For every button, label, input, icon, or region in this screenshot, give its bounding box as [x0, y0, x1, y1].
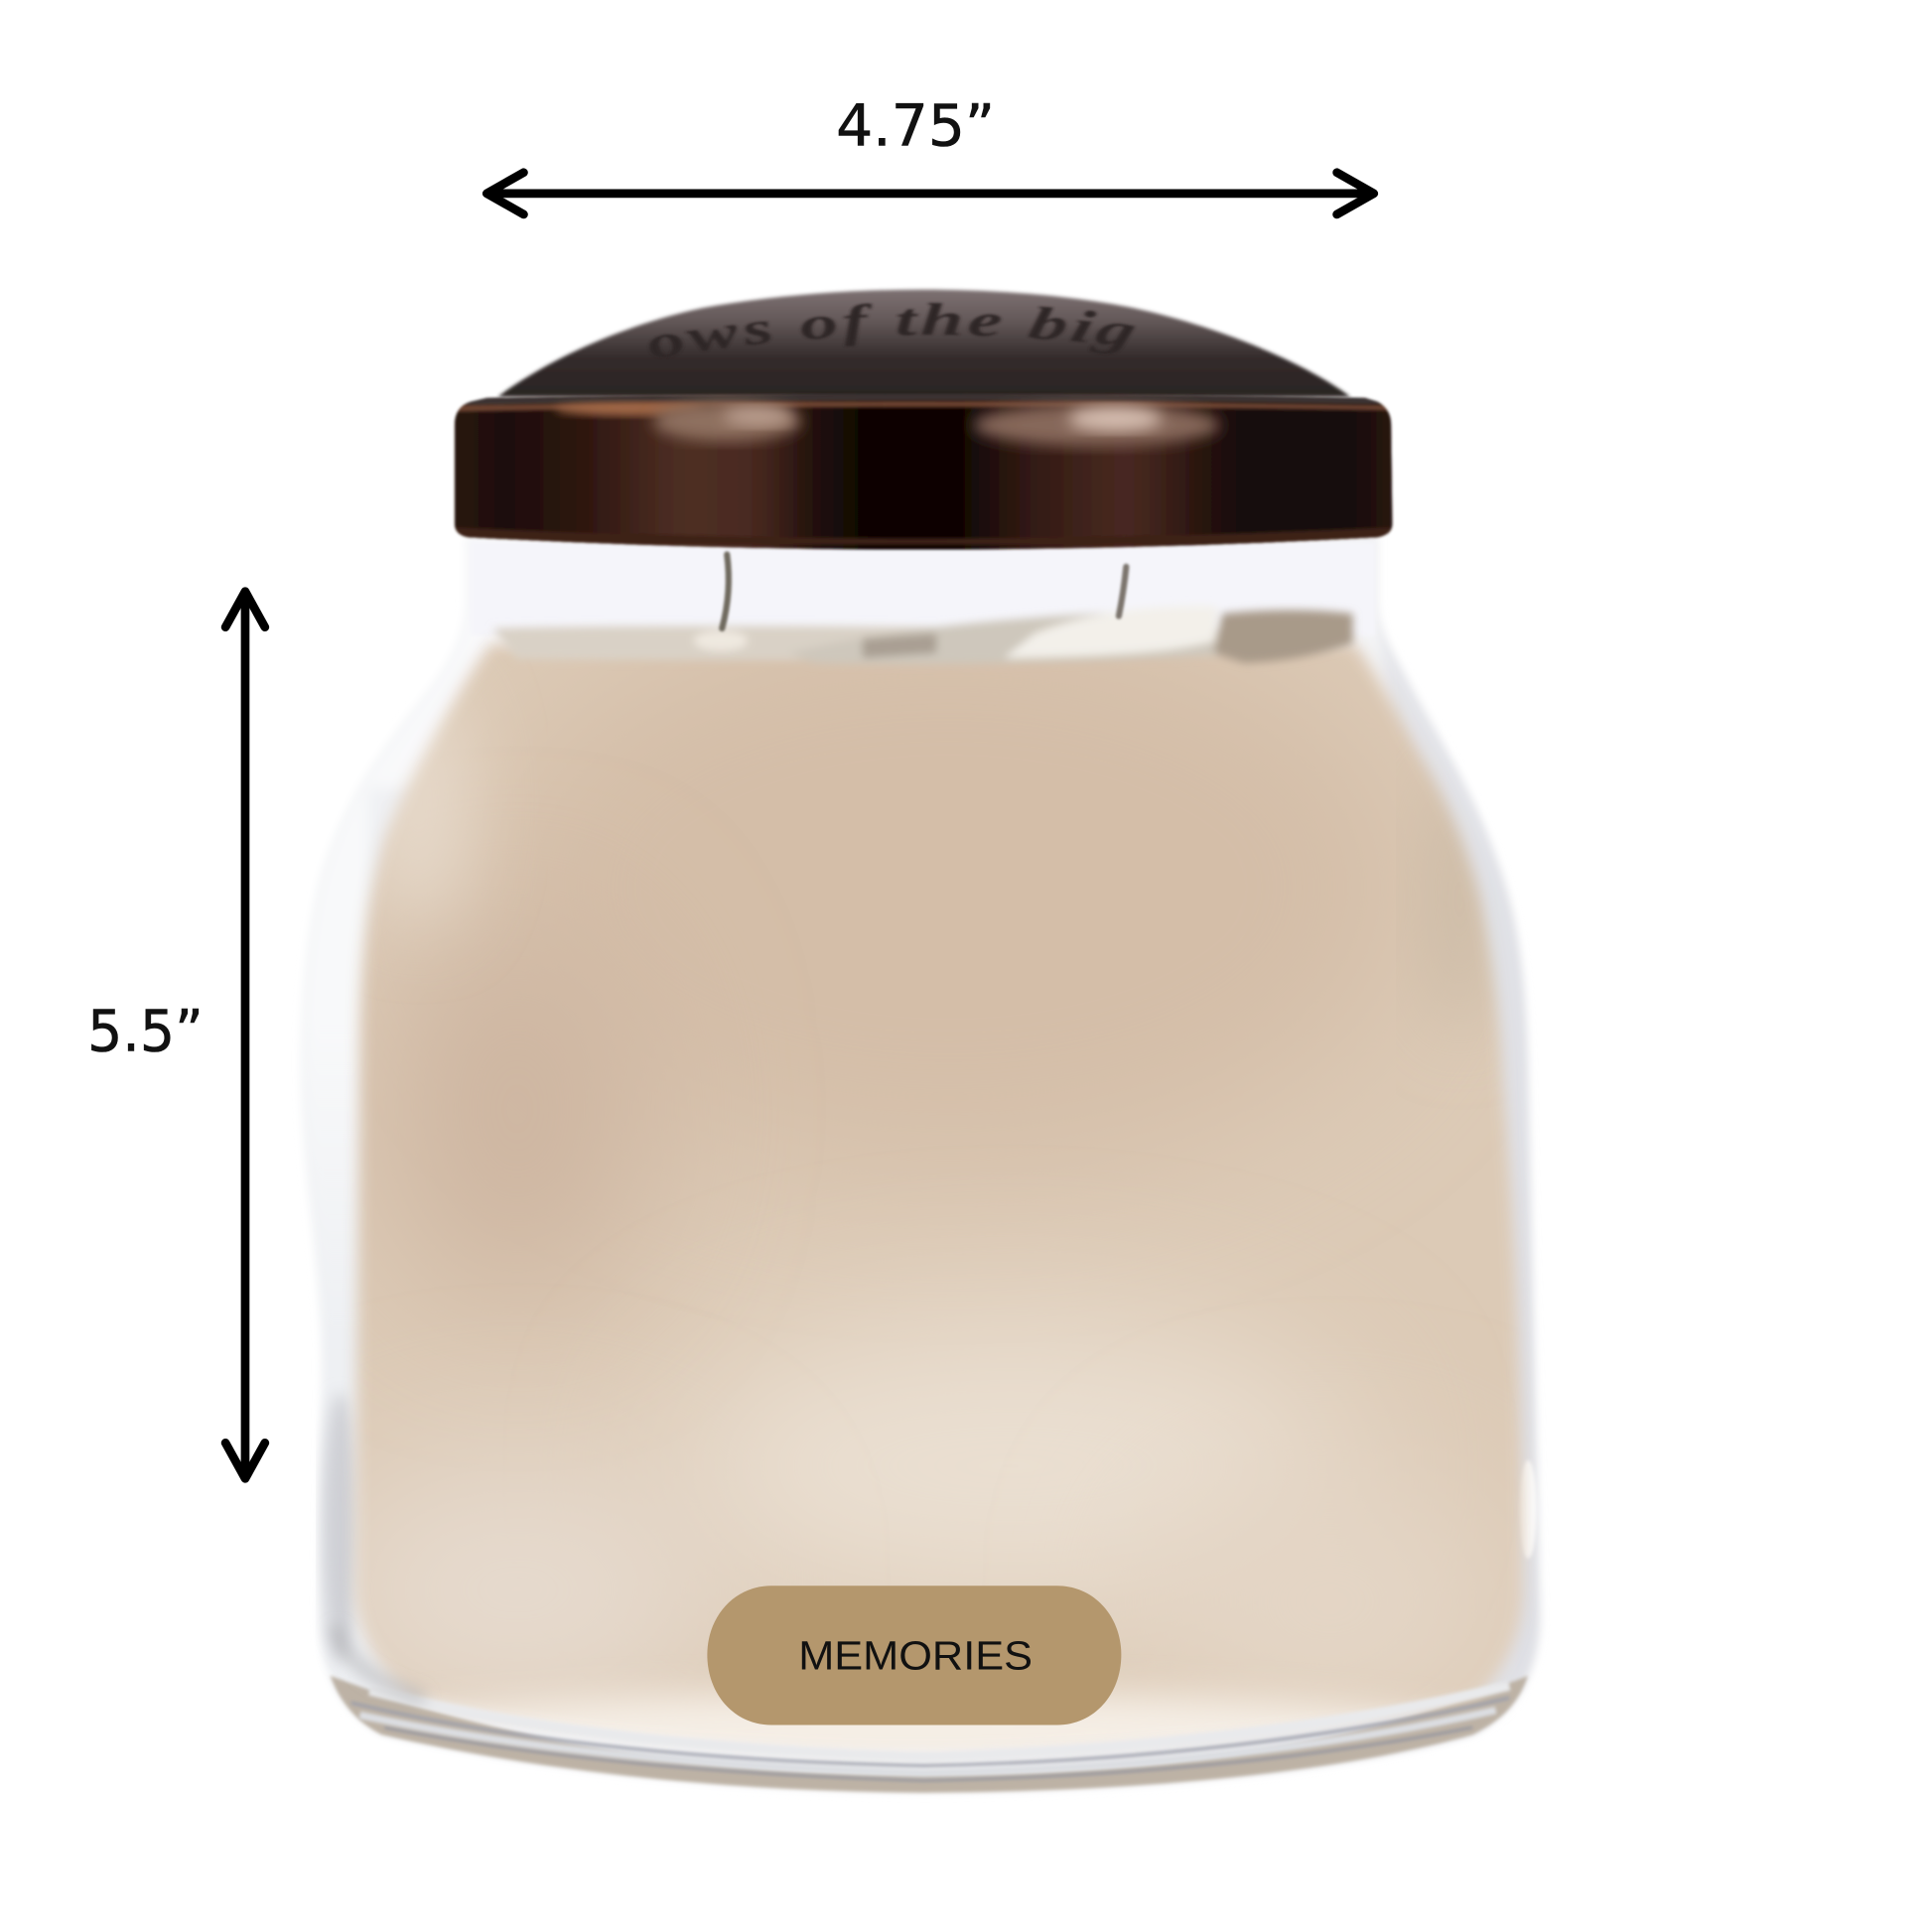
infographic: candle jar with dimensions	[91, 103, 1543, 1795]
height label: 5.5”	[87, 998, 204, 1065]
arrow: width dimension	[486, 173, 1374, 214]
label text: MEMORIES	[798, 1633, 1033, 1679]
arrow: height dimension	[225, 592, 265, 1478]
wax top surface	[492, 606, 1353, 664]
scent label	[707, 1586, 1121, 1725]
lid dome	[459, 287, 1390, 550]
glass base rim	[336, 1626, 1509, 1780]
embossed lid lettering: ows of the big	[649, 302, 1136, 357]
wicks	[722, 554, 1126, 628]
glass body	[302, 537, 1540, 1793]
wax fill	[348, 635, 1531, 1751]
lid rim	[453, 393, 1394, 552]
width label: 4.75”	[836, 91, 995, 159]
candle jar	[303, 287, 1543, 1795]
